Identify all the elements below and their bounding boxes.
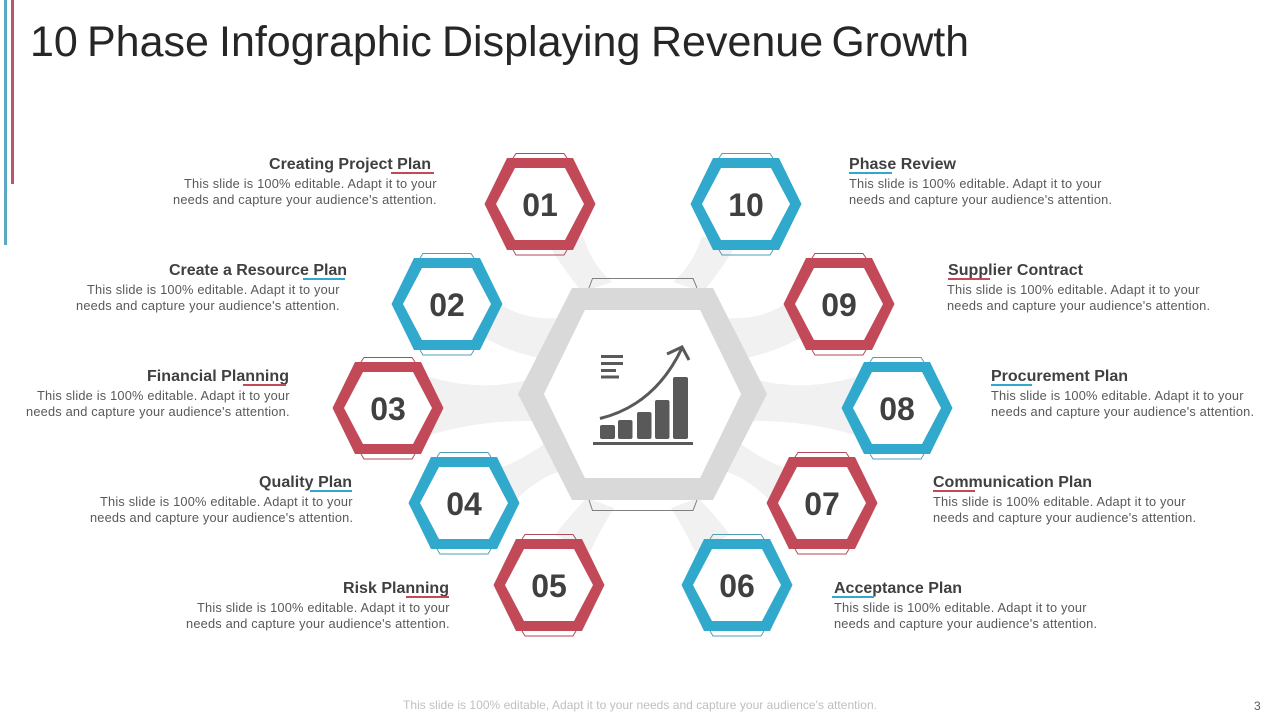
phase 05 hexagon: 05 xyxy=(531,568,567,604)
accent bar: red xyxy=(11,0,14,184)
connectors between phases and centre xyxy=(430,236,855,552)
accent bar: blue xyxy=(4,0,7,245)
text block: Acceptance Plan: Acceptance Plan xyxy=(834,580,962,597)
central hexagon bottom outline xyxy=(589,500,697,510)
phase 03 hexagon xyxy=(332,358,444,459)
text block: Risk Planning xyxy=(186,580,450,631)
text block: Create a Resource Plan: needs and capture your audience's attention. xyxy=(76,298,340,313)
text block: Risk Planning: This slide is 100% editable. Adapt it to your xyxy=(197,600,450,615)
central hexagon fill xyxy=(544,310,741,478)
central hexagon top outline xyxy=(589,278,697,288)
icon: growth chart xyxy=(593,347,693,445)
text block: Financial Planning: needs and capture your audience's attention. xyxy=(26,404,290,419)
text block: Communication Plan xyxy=(933,474,1196,525)
text block: Quality Plan: Quality Plan xyxy=(259,474,352,491)
central hexagon with growth icon xyxy=(518,278,767,510)
text block: Financial Planning xyxy=(26,368,290,419)
text block: Supplier Contract: Supplier Contract xyxy=(948,262,1084,279)
phase 09 hexagon: 09 xyxy=(821,287,857,323)
phase 10 hexagon: 10 xyxy=(728,187,764,223)
text block: Financial Planning: Financial Planning xyxy=(147,368,289,385)
text block: Procurement Plan: Procurement Plan xyxy=(991,368,1128,385)
text block: Supplier Contract xyxy=(947,262,1210,313)
connector 09 xyxy=(729,304,800,358)
text block: Risk Planning: needs and capture your audience's attention. xyxy=(186,616,450,631)
text block: Financial Planning: This slide is 100% editable. Adapt it to your xyxy=(37,388,290,403)
text block: Creating Project Plan xyxy=(173,156,437,207)
text block: Quality Plan xyxy=(90,474,353,525)
text block: Communication Plan: Communication Plan xyxy=(933,474,1092,491)
text block: Procurement Plan: needs and capture your audience's attention. xyxy=(991,404,1254,419)
phase 07 hexagon: 07 xyxy=(804,486,840,522)
phase 04 hexagon xyxy=(408,452,520,554)
phase 05 hexagon xyxy=(494,534,604,636)
phase 02 hexagon: 02 xyxy=(429,287,465,323)
title: Growth xyxy=(832,18,969,66)
text block: Quality Plan: This slide is 100% editable. Adapt it to your xyxy=(100,494,353,509)
phase 01 hexagon xyxy=(484,154,596,255)
title: Phase xyxy=(87,18,209,66)
connector 06 xyxy=(671,498,730,552)
text block: Creating Project Plan: needs and capture your audience's attention. xyxy=(173,192,436,207)
phase 08 hexagon xyxy=(842,358,952,459)
text block: Supplier Contract: needs and capture your audience's attention. xyxy=(947,298,1210,313)
text block: Phase Review xyxy=(849,156,1112,207)
title: 10 xyxy=(30,18,78,66)
text block: Phase Review: needs and capture your audience's attention. xyxy=(849,192,1112,207)
text block: Creating Project Plan: This slide is 100% editable. Adapt it to your xyxy=(184,176,437,191)
text block: Create a Resource Plan: This slide is 100% editable. Adapt it to your xyxy=(87,282,340,297)
central hexagon ring xyxy=(518,288,767,500)
phase 04 hexagon: 04 xyxy=(446,486,482,522)
phase 02 hexagon xyxy=(392,254,502,355)
phase 07 hexagon xyxy=(766,452,878,554)
footer note: This slide is 100% editable, Adapt it to your needs and capture your audience's attention. xyxy=(403,698,877,712)
text block: Communication Plan: This slide is 100% editable. Adapt it to your xyxy=(933,494,1186,509)
connector 04 xyxy=(500,444,558,500)
text block: Create a Resource Plan: Create a Resource Plan xyxy=(169,262,347,279)
connector 07 xyxy=(727,444,785,500)
connector 02 xyxy=(485,304,556,358)
connector 01 xyxy=(552,236,612,292)
phase 06 hexagon: 06 xyxy=(719,568,755,604)
phase 01 hexagon: 01 xyxy=(522,187,558,223)
title: Revenue xyxy=(651,18,823,66)
phase 03 hexagon: 03 xyxy=(370,391,406,427)
phase 10 hexagon xyxy=(690,154,802,255)
phase 08 hexagon: 08 xyxy=(879,391,915,427)
text block: Risk Planning: Risk Planning xyxy=(343,580,449,597)
text block: Acceptance Plan: needs and capture your audience's attention. xyxy=(834,616,1097,631)
text block: Acceptance Plan xyxy=(832,580,1097,631)
text block: Supplier Contract: This slide is 100% editable. Adapt it to your xyxy=(947,282,1200,297)
phase 09 hexagon xyxy=(784,254,894,355)
title: Infographic xyxy=(219,18,432,66)
text block: Phase Review: Phase Review xyxy=(849,156,957,173)
text block: Quality Plan: needs and capture your audience's attention. xyxy=(90,510,353,525)
connector 08 xyxy=(750,377,855,435)
connector 03 xyxy=(430,377,535,435)
phase 06 hexagon xyxy=(682,534,792,636)
text block: Procurement Plan xyxy=(991,368,1254,419)
text block: Communication Plan: needs and capture your audience's attention. xyxy=(933,510,1196,525)
connector 10 xyxy=(673,236,733,292)
page number: 3 xyxy=(1254,699,1261,713)
text block: Creating Project Plan: Creating Project Plan xyxy=(269,156,431,173)
text block: Acceptance Plan: This slide is 100% editable. Adapt it to your xyxy=(834,600,1087,615)
title: Displaying xyxy=(442,18,640,66)
text block: Phase Review: This slide is 100% editable. Adapt it to your xyxy=(849,176,1102,191)
text block: Procurement Plan: This slide is 100% editable. Adapt it to your xyxy=(991,388,1244,403)
connector 05 xyxy=(555,498,614,552)
text block: Create a Resource Plan xyxy=(76,262,347,313)
